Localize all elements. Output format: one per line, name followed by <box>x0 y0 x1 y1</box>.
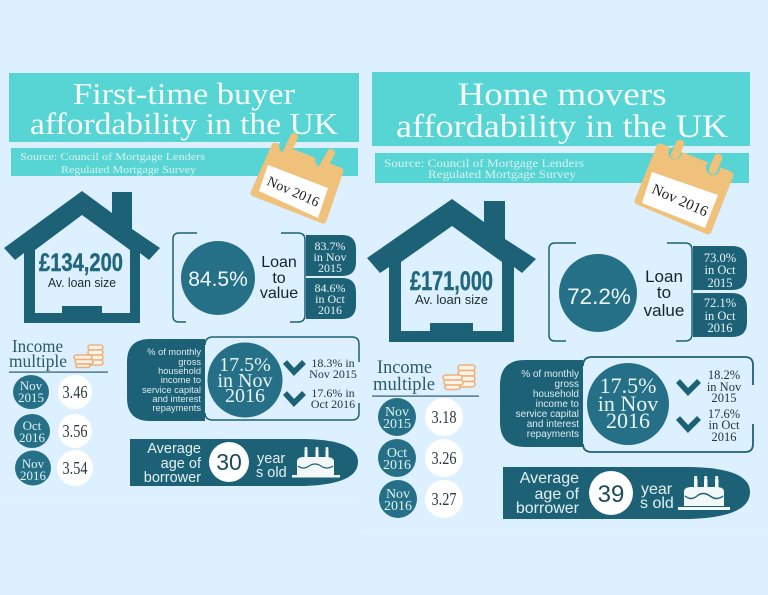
average age panel <box>503 467 750 519</box>
icon: calendar <box>254 137 340 220</box>
loan to value comparison: Oct 2015: 2015 <box>708 276 732 290</box>
income multiple rows: 2016 <box>384 499 412 514</box>
income multiple heading: Income <box>377 357 432 378</box>
income multiple heading <box>9 336 108 373</box>
icon: house with loan size <box>4 191 160 323</box>
income multiple rows: Oct <box>23 418 42 433</box>
income share panel <box>127 337 359 421</box>
average age panel: age of <box>535 486 580 503</box>
source banner: Source: Council of Mortgage Lenders <box>20 151 205 163</box>
icon: coins <box>443 365 475 390</box>
income share panel: 2016 <box>225 385 265 407</box>
icon: calendar: Nov 2016 <box>649 181 711 221</box>
income share panel: 2015 <box>712 391 736 405</box>
income share panel: in Nov <box>598 391 658 416</box>
average age panel <box>130 439 358 486</box>
income share panel: gross <box>178 357 201 367</box>
income multiple rows: Nov <box>20 378 43 393</box>
average age panel: Average <box>147 441 201 457</box>
income share panel: Nov 2015 <box>309 367 357 381</box>
income share panel: Oct 2016 <box>311 397 355 411</box>
income multiple rows: 3.26 <box>432 448 456 468</box>
average age panel: s old <box>640 495 674 512</box>
loan to value comparison: Oct 2016 <box>306 278 356 319</box>
average age panel: age of <box>161 456 202 472</box>
loan to value: Loan <box>645 267 683 286</box>
income share panel: income to <box>161 375 201 385</box>
income multiple rows: 2016 <box>20 468 46 483</box>
income share panel: service capital <box>142 385 201 395</box>
loan to value: 84.5% <box>188 268 248 291</box>
income multiple rows: 2015 <box>18 390 44 405</box>
income multiple rows: 3.54 <box>62 458 88 478</box>
income multiple rows: Nov <box>385 405 409 420</box>
loan to value comparison: Oct 2015: 73.0% <box>704 251 736 265</box>
income share panel: household <box>158 366 201 376</box>
income multiple heading: multiple <box>373 374 435 395</box>
income share panel: 17.6% <box>708 407 740 421</box>
income share panel: % of monthly <box>147 347 201 357</box>
title banner <box>9 73 359 142</box>
income share panel: and interest <box>527 419 579 430</box>
income multiple heading <box>372 357 479 397</box>
income multiple rows: 3.18 <box>432 407 456 427</box>
income multiple rows: 3.56 <box>62 421 88 441</box>
income multiple heading: multiple <box>9 351 67 371</box>
icon: house with loan size: Av. loan size <box>48 276 116 290</box>
loan to value comparison: Oct 2015: in Oct <box>705 263 736 277</box>
income share panel <box>500 357 753 452</box>
income share panel: % of monthly <box>521 369 579 380</box>
income share panel: 2016 <box>606 408 650 433</box>
income multiple rows: Nov <box>386 487 410 502</box>
income multiple rows <box>378 398 463 518</box>
title banner <box>372 72 750 146</box>
average age panel: s old <box>256 465 287 481</box>
income share panel: and interest <box>152 394 201 404</box>
income multiple rows: 2015 <box>383 417 411 432</box>
source banner <box>11 148 358 176</box>
loan to value: value <box>644 301 684 320</box>
icon: birthday cake <box>292 447 340 478</box>
income share panel: 17.6% in <box>311 386 355 400</box>
average age panel: year <box>257 451 285 467</box>
panel: first-time buyers <box>4 73 359 486</box>
loan to value: to <box>272 270 286 287</box>
loan to value: to <box>657 283 671 302</box>
loan to value comparison: Oct 2016: 72.1% <box>704 296 736 310</box>
income multiple rows: Oct <box>387 446 407 461</box>
average age panel: borrower <box>516 500 580 517</box>
income share panel: gross <box>555 379 579 390</box>
loan to value: Loan <box>261 254 297 271</box>
title banner: affordability in the UK <box>396 109 728 145</box>
source banner: Regulated Mortgage Survey <box>61 164 197 176</box>
average age panel: 30 <box>216 449 242 475</box>
icon: house with loan size: £134,200 <box>39 249 123 277</box>
loan to value comparison: Nov 2015: in Nov <box>314 250 346 264</box>
average age panel: borrower <box>144 470 201 486</box>
income share panel: repayments <box>527 429 579 440</box>
income share panel: 17.5% <box>219 354 271 376</box>
source banner: Source: Council of Mortgage Lenders <box>384 156 584 170</box>
average age panel: Average <box>520 470 579 487</box>
loan to value: value <box>260 285 298 302</box>
income share panel: household <box>533 389 579 400</box>
icon: coins <box>74 345 103 368</box>
income share panel: 2016 <box>712 430 736 444</box>
income multiple rows <box>13 375 93 486</box>
income share panel: 18.3% in <box>311 356 355 370</box>
loan to value comparison: Oct 2016 <box>693 293 747 337</box>
income share panel: service capital <box>516 409 579 420</box>
source banner <box>375 153 749 183</box>
loan to value comparison: Oct 2016: in Oct <box>315 292 345 306</box>
title banner: Home movers <box>458 77 666 113</box>
income share panel: in Oct <box>709 418 740 432</box>
icon: house with loan size <box>367 199 536 342</box>
average age panel: year <box>641 481 673 498</box>
icon: calendar: Nov 2016 <box>264 174 321 211</box>
income share panel: in Nov <box>707 380 742 394</box>
income share panel: 18.2% <box>708 368 740 382</box>
income share panel: in Nov <box>218 370 272 392</box>
icon: house with loan size: £171,000 <box>410 266 493 296</box>
average age panel: 39 <box>598 481 624 508</box>
panel: home movers <box>367 72 753 519</box>
loan to value <box>173 233 305 322</box>
icon: birthday cake <box>678 476 730 510</box>
icon: calendar <box>638 144 730 231</box>
title banner: First-time buyer <box>73 76 296 111</box>
income multiple rows: 3.46 <box>62 382 88 402</box>
title banner: affordability in the UK <box>30 106 339 141</box>
income multiple rows: Nov <box>22 456 45 471</box>
source banner: Regulated Mortgage Survey <box>428 167 576 181</box>
income share panel: 17.5% <box>600 373 656 398</box>
loan to value comparison: Oct 2016: in Oct <box>705 309 736 323</box>
loan to value comparison: Nov 2015 <box>306 235 356 276</box>
loan to value comparison: Oct 2016: 2016 <box>708 321 732 335</box>
income share panel: income to <box>536 399 579 410</box>
income share panel: repayments <box>152 403 201 413</box>
loan to value: 72.2% <box>567 284 631 309</box>
loan to value <box>549 243 692 341</box>
loan to value comparison: Nov 2015: 83.7% <box>314 239 346 253</box>
loan to value comparison: Oct 2016: 2016 <box>318 303 342 317</box>
income multiple rows: 3.27 <box>432 489 456 509</box>
income multiple heading: Income <box>12 336 63 356</box>
icon: house with loan size: Av. loan size <box>415 292 488 307</box>
income multiple rows: 2016 <box>19 430 46 445</box>
income multiple rows: 2016 <box>383 458 411 473</box>
loan to value comparison: Oct 2015 <box>693 246 747 290</box>
loan to value comparison: Oct 2016: 84.6% <box>314 281 346 295</box>
loan to value comparison: Nov 2015: 2015 <box>318 261 342 275</box>
